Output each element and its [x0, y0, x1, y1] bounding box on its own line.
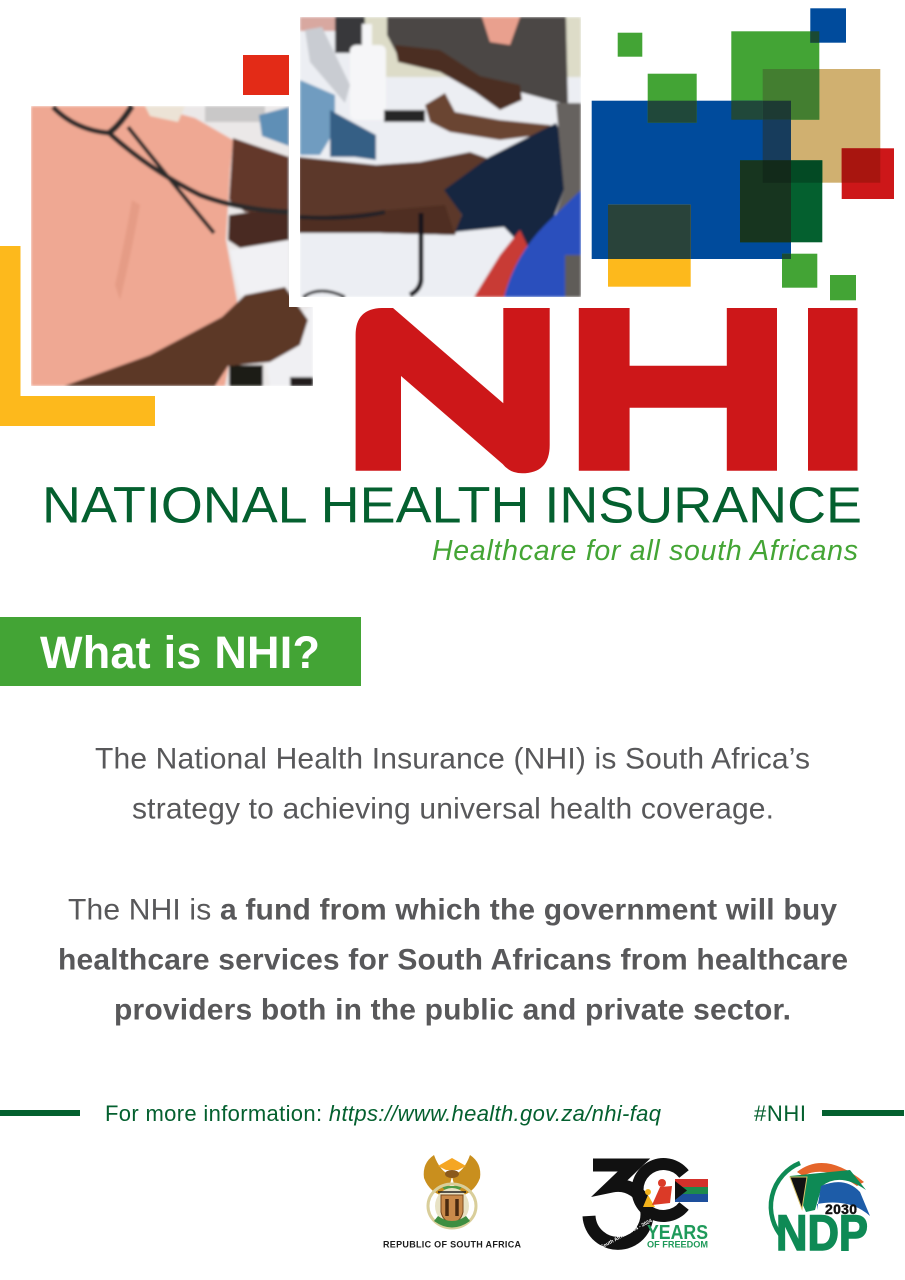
paragraph: NHI strategy: The National Health Insurance (NHI) is South Africa’s: [95, 742, 810, 776]
logo: 30 years of freedom: YEARS: [647, 1222, 708, 1244]
NHI logo letters: [356, 308, 858, 473]
paragraph: NHI fund definition: providers both in the public and private sector.: [114, 994, 791, 1026]
paragraph: NHI fund definition: [58, 894, 848, 1026]
footer: more information line: For more information: https://www.health.gov.za/nhi-faq: [105, 1101, 662, 1126]
logo: 30 years of freedom: [589, 1164, 708, 1250]
logo: 30 years of freedom: South Africa 1994 - 2024: [600, 1218, 653, 1250]
yellow corner bracket: [0, 246, 155, 426]
logo: 30 years of freedom: OF FREEDOM: [647, 1240, 708, 1250]
tagline: Healthcare for all south Africans: [432, 535, 858, 567]
logo: coat of arms: [424, 1155, 480, 1228]
logo: NDP 2030: [771, 1163, 870, 1261]
heading banner: What is NHI?: What is NHI?: [40, 627, 320, 678]
heading banner: What is NHI?: [0, 617, 361, 686]
logo: NDP 2030: 2030: [825, 1201, 857, 1217]
title: National Health Insurance: NATIONAL HEALTH INSURANCE: [42, 476, 862, 534]
red square accent: [243, 55, 289, 95]
paragraph: NHI strategy: [95, 742, 810, 826]
paragraph: NHI strategy: strategy to achieving universal health coverage.: [132, 792, 774, 826]
paragraph: NHI fund definition: The NHI is a fund from which the government will buy: [68, 894, 837, 926]
footer: more information line: #NHI: [754, 1101, 806, 1126]
paragraph: NHI fund definition: healthcare services for South Africans from healthcare: [58, 944, 848, 976]
logo: NDP 2030: NDP: [776, 1205, 868, 1261]
photo: health worker with stethoscope: [31, 106, 313, 386]
overlapping colour squares: [592, 8, 894, 300]
logo label: Republic of South Africa: REPUBLIC OF SOUTH AFRICA: [383, 1240, 522, 1250]
photo: blood pressure check: [299, 17, 581, 297]
footer: more information line: [0, 1101, 904, 1126]
